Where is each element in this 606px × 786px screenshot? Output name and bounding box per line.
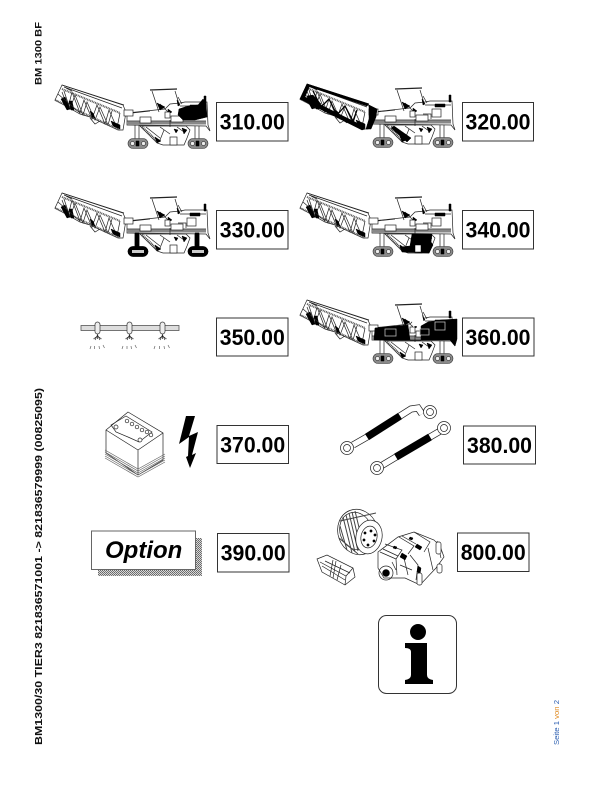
panel: 390.00 [92,531,289,576]
reference box 340.00: 340.00 [466,218,530,242]
icon: lightning bolt [179,416,198,468]
icon: information symbol [378,616,456,694]
reference box 800.00 [458,533,529,572]
page number: Seite 1 von 2 [554,700,561,745]
reference box 330.00: 330.00 [220,218,285,242]
wheel motor [331,504,385,560]
reference box 340.00 [462,210,534,249]
reference box 350.00: 350.00 [220,325,285,350]
reference box 370.00: 370.00 [220,432,285,458]
icon: machine with chassis highlighted [300,300,457,364]
reference box 350.00 [216,318,288,356]
icon: battery [105,412,165,477]
reference box 390.00 [218,534,289,572]
panel: 360.00 [300,300,534,364]
hydraulic pump [378,532,444,585]
reference box 360.00 [462,318,534,356]
panel: 310.00 [55,85,288,148]
reference box 310.00: 310.00 [220,110,285,134]
reference box 330.00 [216,210,288,249]
icon: spray bar with nozzles [81,322,179,349]
panel: 340.00 [300,193,534,256]
reference box 370.00 [217,426,288,464]
reference box 320.00: 320.00 [466,110,530,134]
valve block [317,555,355,585]
icon: machine with conveyor highlighted [300,84,455,148]
panel: 350.00 [81,318,288,356]
panel: 380.00 [340,406,536,474]
reference box 390.00: 390.00 [221,540,286,566]
icon: option label [92,531,202,576]
icon: option label: Option [105,537,182,564]
reference box 380.00 [464,426,536,464]
panel: 330.00 [55,193,288,256]
panel: 370.00 [105,412,288,477]
side label: model and serial range: BM1300/30 TIER3 821836571001 -> 821836579999 (00825095) [34,388,45,745]
icon: machine with milling drum highlighted [300,193,455,256]
icon: hydraulic components [317,504,444,585]
panel: 800.00 [317,504,529,585]
reference box 310.00 [216,102,288,141]
icon: machine with tracks highlighted [55,193,210,256]
reference box 800.00: 800.00 [461,540,526,565]
icon: hydraulic hoses [340,406,450,474]
reference box 320.00 [462,102,534,141]
reference box 360.00: 360.00 [466,325,530,350]
panel: 320.00 [300,84,534,148]
reference box 380.00: 380.00 [467,433,532,458]
icon: machine with engine highlighted [55,85,210,148]
header label: BM 1300 BF: BM 1300 BF [34,22,44,85]
